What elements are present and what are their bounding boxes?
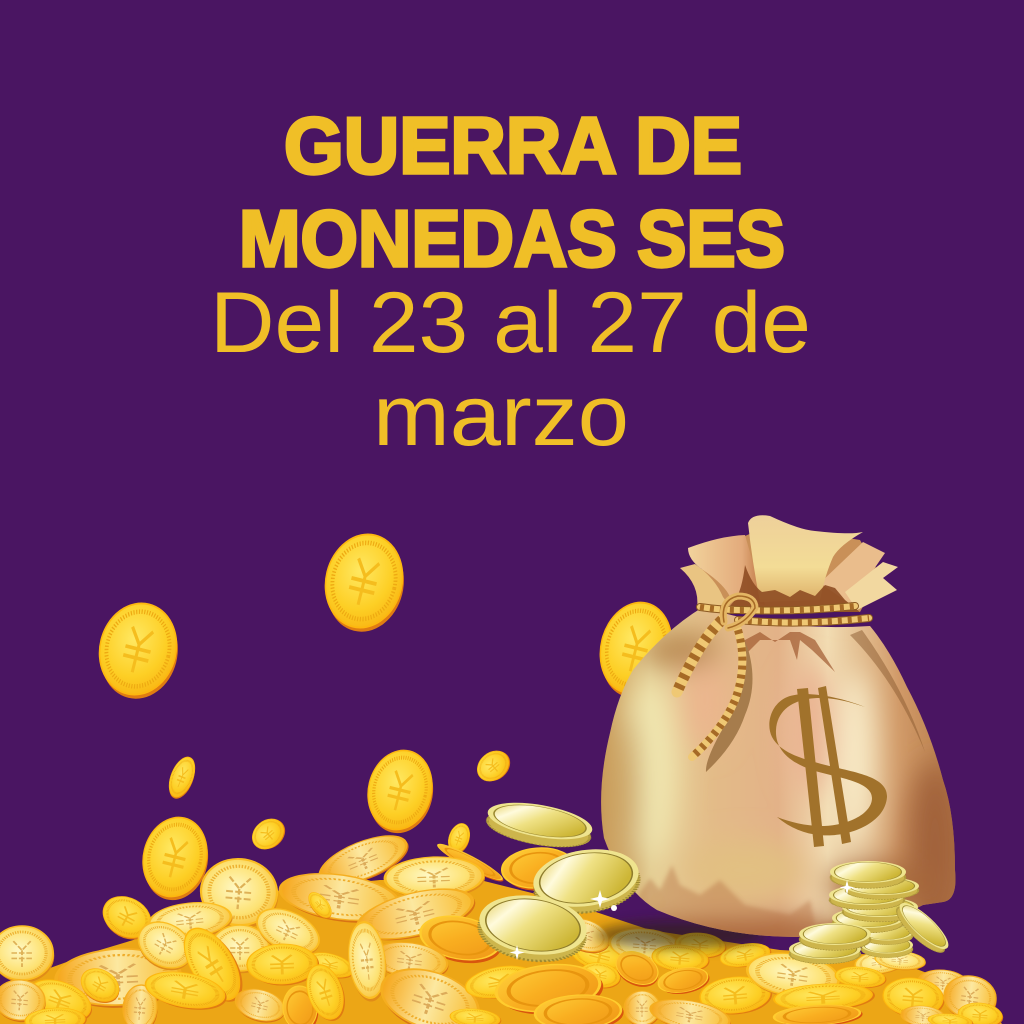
date subtitle: marzo: [373, 368, 629, 464]
title: MONEDAS SES: [239, 194, 785, 283]
sparkles: [510, 880, 854, 960]
dollar sign: [769, 686, 887, 847]
bag body: [601, 607, 956, 937]
date subtitle: [210, 275, 811, 464]
shadow under bag: [595, 921, 765, 949]
ruffle folds: [680, 515, 898, 612]
date subtitle: Del 23 al 27 de: [210, 275, 811, 371]
bag shading: [611, 630, 963, 948]
coin pile: [0, 825, 1004, 1024]
coin stack: [789, 861, 954, 964]
rope and knot: [677, 596, 869, 757]
money bag: [601, 515, 963, 948]
metallic coins: [475, 796, 643, 968]
floating coins: [89, 526, 683, 907]
title: [239, 101, 785, 283]
title: GUERRA DE: [284, 101, 742, 190]
